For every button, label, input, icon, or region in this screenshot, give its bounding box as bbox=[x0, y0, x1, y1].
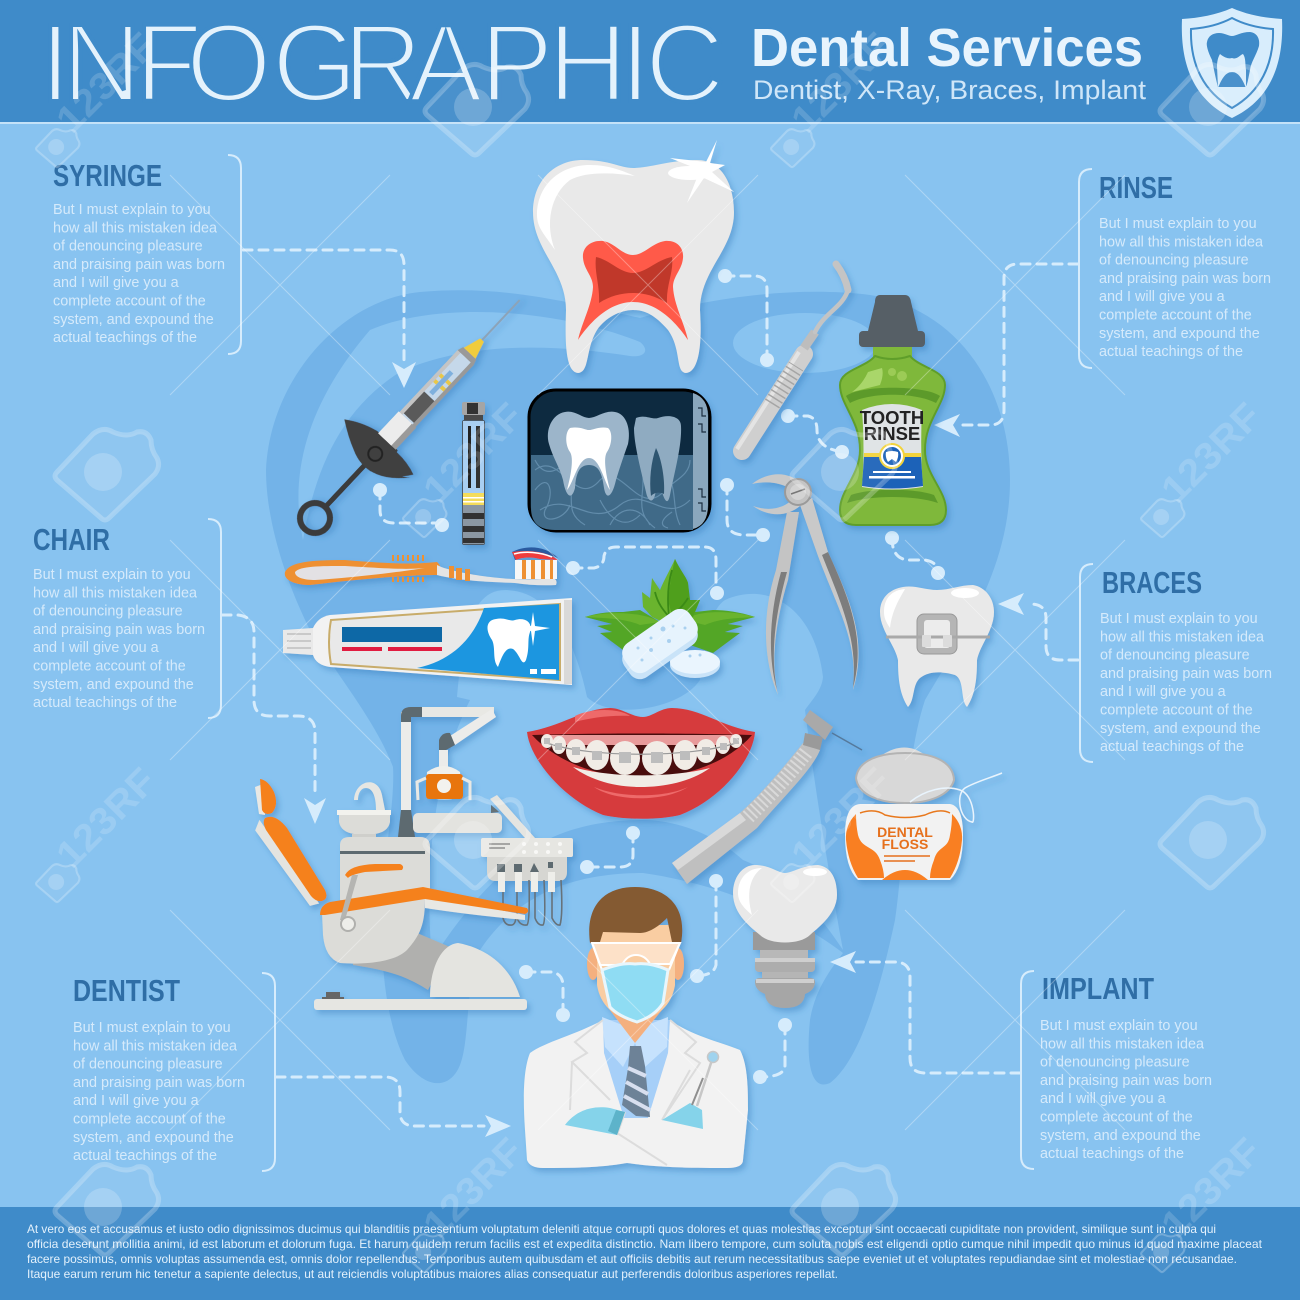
panel: chair text bbox=[33, 519, 221, 718]
body text: implant: actual teachings of the bbox=[1040, 1146, 1184, 1162]
armrest bbox=[345, 864, 403, 878]
headrest bbox=[255, 784, 265, 815]
column and dome bbox=[353, 933, 450, 990]
footer text: Itaque earum rerum hic tenetur a sapiente delectus, ut aut reiciendis voluptatibus maiores alias consequatur aut perferendis doloribus asperiores repellat. bbox=[27, 1268, 838, 1281]
body text: syringe: system, and expound the bbox=[53, 312, 214, 328]
watermark text: 123RF bbox=[49, 25, 165, 141]
body text: dentist: But I must explain to you bbox=[73, 1020, 231, 1036]
base plate bbox=[314, 999, 527, 1010]
watermark text: 123RF bbox=[784, 760, 900, 876]
arrow: rinse label to bottle bbox=[934, 264, 1078, 437]
lab coat bbox=[524, 1020, 748, 1168]
body text: braces: and I will give you a bbox=[1100, 684, 1226, 700]
body text: implant: But I must explain to you bbox=[1040, 1018, 1198, 1034]
panel: implant text bbox=[1021, 971, 1212, 1169]
watermark text: 123RF bbox=[49, 760, 165, 876]
heading: rinse: RINSE bbox=[1099, 171, 1173, 205]
footer text: facere possimus, omnis voluptas assumenda est, omnis dolor repellendus. Temporibus autem quibusdam et aut officiis debitis aut rerum necessitatibus saepe eveniet ut et voluptates repudiandae sint et molestiae non recusandae. bbox=[27, 1253, 1237, 1266]
arrow: implant label to implant bbox=[830, 951, 1020, 1073]
footer text: At vero eos et accusamus et iusto odio dignissimos ducimus qui blanditiis praesentium voluptatum deleniti atque corrupti quos dolores et quas molestias excepturi sint occaecati cupiditate non provident, similique sunt in culpa qui bbox=[27, 1223, 1216, 1236]
icon: anesthetic cartridge bbox=[462, 402, 485, 545]
lamp post and arms bbox=[401, 712, 411, 810]
body text: rinse: actual teachings of the bbox=[1099, 344, 1243, 360]
heading: dentist: DENTIST bbox=[73, 974, 180, 1008]
body text: syringe: how all this mistaken idea bbox=[53, 220, 217, 236]
body text: rinse: and praising pain was born bbox=[1099, 271, 1271, 287]
body text: chair: and praising pain was born bbox=[33, 622, 205, 638]
panel: braces text bbox=[1080, 564, 1272, 762]
body text: dentist: complete account of the bbox=[73, 1112, 226, 1128]
icon: dental probe bbox=[737, 264, 848, 451]
body text: syringe: and I will give you a bbox=[53, 275, 179, 291]
body text: braces: system, and expound the bbox=[1100, 721, 1261, 737]
body text: chair: of denouncing pleasure bbox=[33, 604, 183, 620]
title: INFOGRAPHIC: INFOGRAPHIC bbox=[40, 2, 724, 125]
body text: implant: of denouncing pleasure bbox=[1040, 1055, 1190, 1071]
footer text bbox=[27, 1223, 1263, 1281]
lapels bbox=[570, 1020, 700, 1165]
body text: implant: complete account of the bbox=[1040, 1110, 1193, 1126]
dental lamp bbox=[426, 766, 463, 800]
body text: syringe: and praising pain was born bbox=[53, 257, 225, 273]
body text: rinse: But I must explain to you bbox=[1099, 216, 1257, 232]
icon: syringe bbox=[271, 269, 550, 558]
icon: dental handpiece bbox=[672, 710, 862, 884]
body text: syringe: complete account of the bbox=[53, 294, 206, 310]
watermark text: 123RF bbox=[1154, 1130, 1270, 1246]
sink cabinet bbox=[340, 837, 430, 900]
subheading: Dentist, X-Ray, Braces, Implant bbox=[753, 75, 1147, 105]
body text: braces: actual teachings of the bbox=[1100, 739, 1244, 755]
icon: mouth rinse bottle bbox=[840, 295, 946, 525]
seat lower plate bbox=[425, 895, 525, 920]
heading: chair: CHAIR bbox=[33, 523, 110, 557]
backrest bbox=[258, 825, 315, 903]
arrow: syringe label to syringe bbox=[243, 250, 416, 388]
body text: dentist: and I will give you a bbox=[73, 1093, 199, 1109]
footer band bbox=[0, 1207, 1300, 1300]
header band bbox=[0, 0, 1300, 125]
body text: rinse: of denouncing pleasure bbox=[1099, 253, 1249, 269]
body text: dentist: system, and expound the bbox=[73, 1130, 234, 1146]
body text: implant: system, and expound the bbox=[1040, 1128, 1201, 1144]
seat cushion bbox=[320, 887, 528, 915]
body text: dentist: actual teachings of the bbox=[73, 1148, 217, 1164]
necktie bbox=[622, 1046, 650, 1117]
face mask bbox=[602, 964, 668, 1022]
panel: syringe text bbox=[53, 155, 241, 354]
safety glasses bbox=[592, 943, 680, 965]
panel: dentist text bbox=[73, 973, 275, 1171]
body text: rinse: and I will give you a bbox=[1099, 289, 1225, 305]
heading: syringe: SYRINGE bbox=[53, 159, 162, 193]
body text: braces: complete account of the bbox=[1100, 702, 1253, 718]
seat body bbox=[322, 898, 425, 964]
watermark text: 123RF bbox=[784, 25, 900, 141]
icon: dental floss: FLOSS bbox=[882, 836, 928, 852]
body text: syringe: actual teachings of the bbox=[53, 330, 197, 346]
arrow: chair label to chair bbox=[222, 615, 326, 824]
body text: implant: how all this mistaken idea bbox=[1040, 1036, 1204, 1052]
body text: chair: system, and expound the bbox=[33, 677, 194, 693]
instrument panel bbox=[481, 838, 573, 857]
watermark lines bbox=[170, 175, 1125, 1130]
icon: tooth with bracket bbox=[880, 585, 994, 707]
icon: shield with tooth bbox=[1182, 8, 1282, 118]
body text: rinse: system, and expound the bbox=[1099, 326, 1260, 342]
body text: braces: of denouncing pleasure bbox=[1100, 648, 1250, 664]
body text: rinse: how all this mistaken idea bbox=[1099, 234, 1263, 250]
footer text: officia deserunt mollitia animi, id est laborum et dolorum fuga. Et harum quidem rerum facilis est et expedita distinctio. Nam libero tempore, cum soluta nobis est eligendi optio cumque nihil impedit quo minus id quod maxime placeat bbox=[27, 1238, 1263, 1251]
body text: braces: But I must explain to you bbox=[1100, 611, 1258, 627]
panel: rinse text bbox=[1079, 169, 1271, 368]
body text: chair: actual teachings of the bbox=[33, 695, 177, 711]
heading: implant: IMPLANT bbox=[1042, 972, 1154, 1006]
large tooth silhouette bbox=[266, 290, 1010, 1085]
body text: chair: how all this mistaken idea bbox=[33, 585, 197, 601]
watermark text: 123RF bbox=[1154, 395, 1270, 511]
arrow: dentist label to dentist bbox=[276, 1077, 511, 1137]
tray arm bbox=[413, 813, 502, 833]
basin and faucet bbox=[354, 782, 385, 810]
body text: braces: and praising pain was born bbox=[1100, 666, 1272, 682]
head bbox=[587, 948, 599, 980]
body text: dentist: and praising pain was born bbox=[73, 1075, 245, 1091]
heading: Dental Services: Dental Services bbox=[751, 18, 1143, 78]
illustration: dental chair bbox=[255, 707, 573, 1010]
icon: toothbrush bbox=[285, 547, 558, 585]
body text: chair: and I will give you a bbox=[33, 640, 159, 656]
body text: implant: and I will give you a bbox=[1040, 1091, 1166, 1107]
icon: mint gum bbox=[585, 559, 755, 684]
icon: dental floss bbox=[845, 748, 1002, 880]
label text: dental floss: DENTAL bbox=[877, 824, 933, 840]
dotted connectors bbox=[373, 269, 945, 1084]
icon: smile with braces bbox=[527, 708, 755, 819]
body text: chair: But I must explain to you bbox=[33, 567, 191, 583]
watermark text: 123RF bbox=[416, 395, 532, 511]
body text: dentist: of denouncing pleasure bbox=[73, 1057, 223, 1073]
icon: dental x-ray bbox=[529, 390, 710, 531]
label text: tooth rinse: TOOTH bbox=[860, 407, 924, 428]
body text: rinse: complete account of the bbox=[1099, 308, 1252, 324]
body text: chair: complete account of the bbox=[33, 658, 186, 674]
icon: large tooth with pulp bbox=[533, 140, 734, 373]
icon: dental forceps bbox=[752, 474, 859, 695]
icon: dental implant bbox=[733, 865, 837, 1008]
icon: toothpaste tube bbox=[283, 598, 572, 685]
heading: braces: BRACES bbox=[1102, 566, 1202, 600]
body text: implant: and praising pain was born bbox=[1040, 1073, 1212, 1089]
shirt bbox=[603, 1020, 670, 1118]
illustration: dentist bbox=[524, 887, 748, 1168]
body text: syringe: But I must explain to you bbox=[53, 202, 211, 218]
mirror instrument bbox=[697, 1060, 712, 1106]
watermark text: 123RF bbox=[416, 1130, 532, 1246]
arrow: braces label to tooth bbox=[998, 593, 1078, 660]
icon: mouth rinse bottle: RINSE bbox=[864, 423, 920, 444]
gloves bbox=[565, 1107, 625, 1135]
body text: syringe: of denouncing pleasure bbox=[53, 239, 203, 255]
body text: braces: how all this mistaken idea bbox=[1100, 629, 1264, 645]
body text: dentist: how all this mistaken idea bbox=[73, 1038, 237, 1054]
